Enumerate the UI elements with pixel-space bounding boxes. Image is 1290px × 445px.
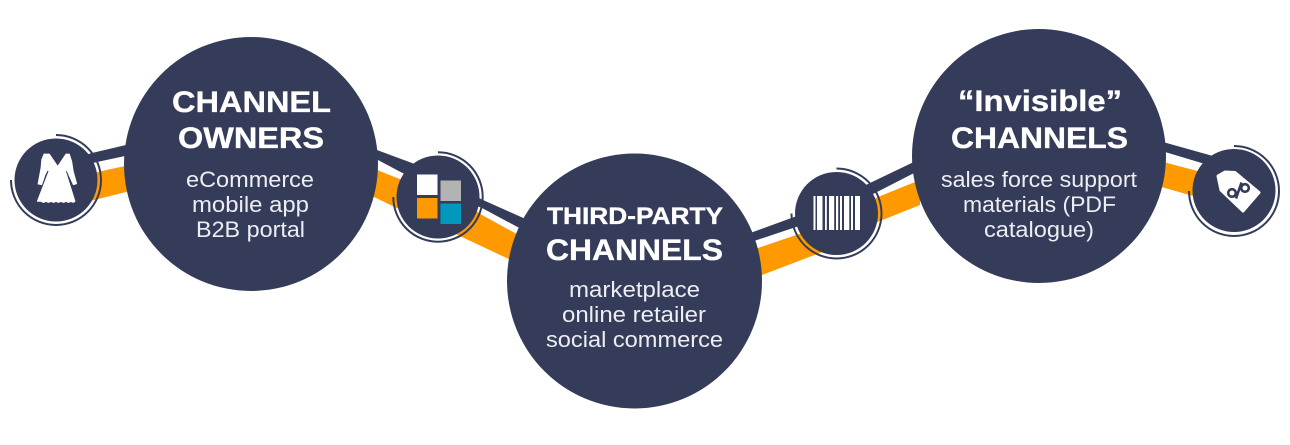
icon: price tag badge [1189, 146, 1279, 236]
panel: third-party channels [507, 154, 762, 408]
text: invisible channels description: catalogue) [984, 217, 1094, 242]
text: channel owners list: eCommerce [186, 167, 314, 192]
text: invisible channels description [941, 167, 1137, 242]
text: channel owners list: B2B portal [196, 217, 305, 242]
heading: invisible channels [951, 85, 1128, 155]
text: channel owners list [186, 167, 314, 242]
connector: third-party channels to barcode icon [745, 213, 825, 279]
text: third-party channels list: online retailer [562, 302, 706, 327]
connector: invisible channels to tag icon [1155, 140, 1220, 198]
text: third-party channels list [546, 277, 723, 352]
heading: channel owners: CHANNEL [172, 86, 331, 119]
panel: invisible channels [912, 29, 1166, 283]
heading: channel owners: OWNERS [178, 122, 324, 155]
heading: third-party channels: CHANNELS [546, 234, 723, 267]
connector: tiles icon to third-party channels [450, 196, 530, 262]
panel: channel owners [124, 37, 378, 291]
heading: invisible channels: CHANNELS [951, 122, 1128, 155]
text: third-party channels list: social commerce [546, 327, 723, 352]
icon: barcode badge [792, 168, 882, 258]
icon: tiles badge [393, 152, 483, 242]
heading: invisible channels: “Invisible” [958, 85, 1122, 118]
text: invisible channels description: materials (PDF [963, 192, 1116, 217]
icon: dress badge [11, 135, 101, 225]
text: channel owners list: mobile app [192, 192, 309, 217]
heading: third-party channels [546, 203, 723, 267]
text: invisible channels description: sales force support [941, 167, 1137, 192]
heading: third-party channels: THIRD-PARTY [547, 203, 723, 230]
connector: channel owners to tiles icon [368, 147, 420, 212]
text: third-party channels list: marketplace [569, 277, 700, 302]
connector: dress icon to channel owners [85, 144, 130, 201]
connector: barcode icon to invisible channels [862, 159, 920, 226]
heading: channel owners [172, 86, 331, 155]
